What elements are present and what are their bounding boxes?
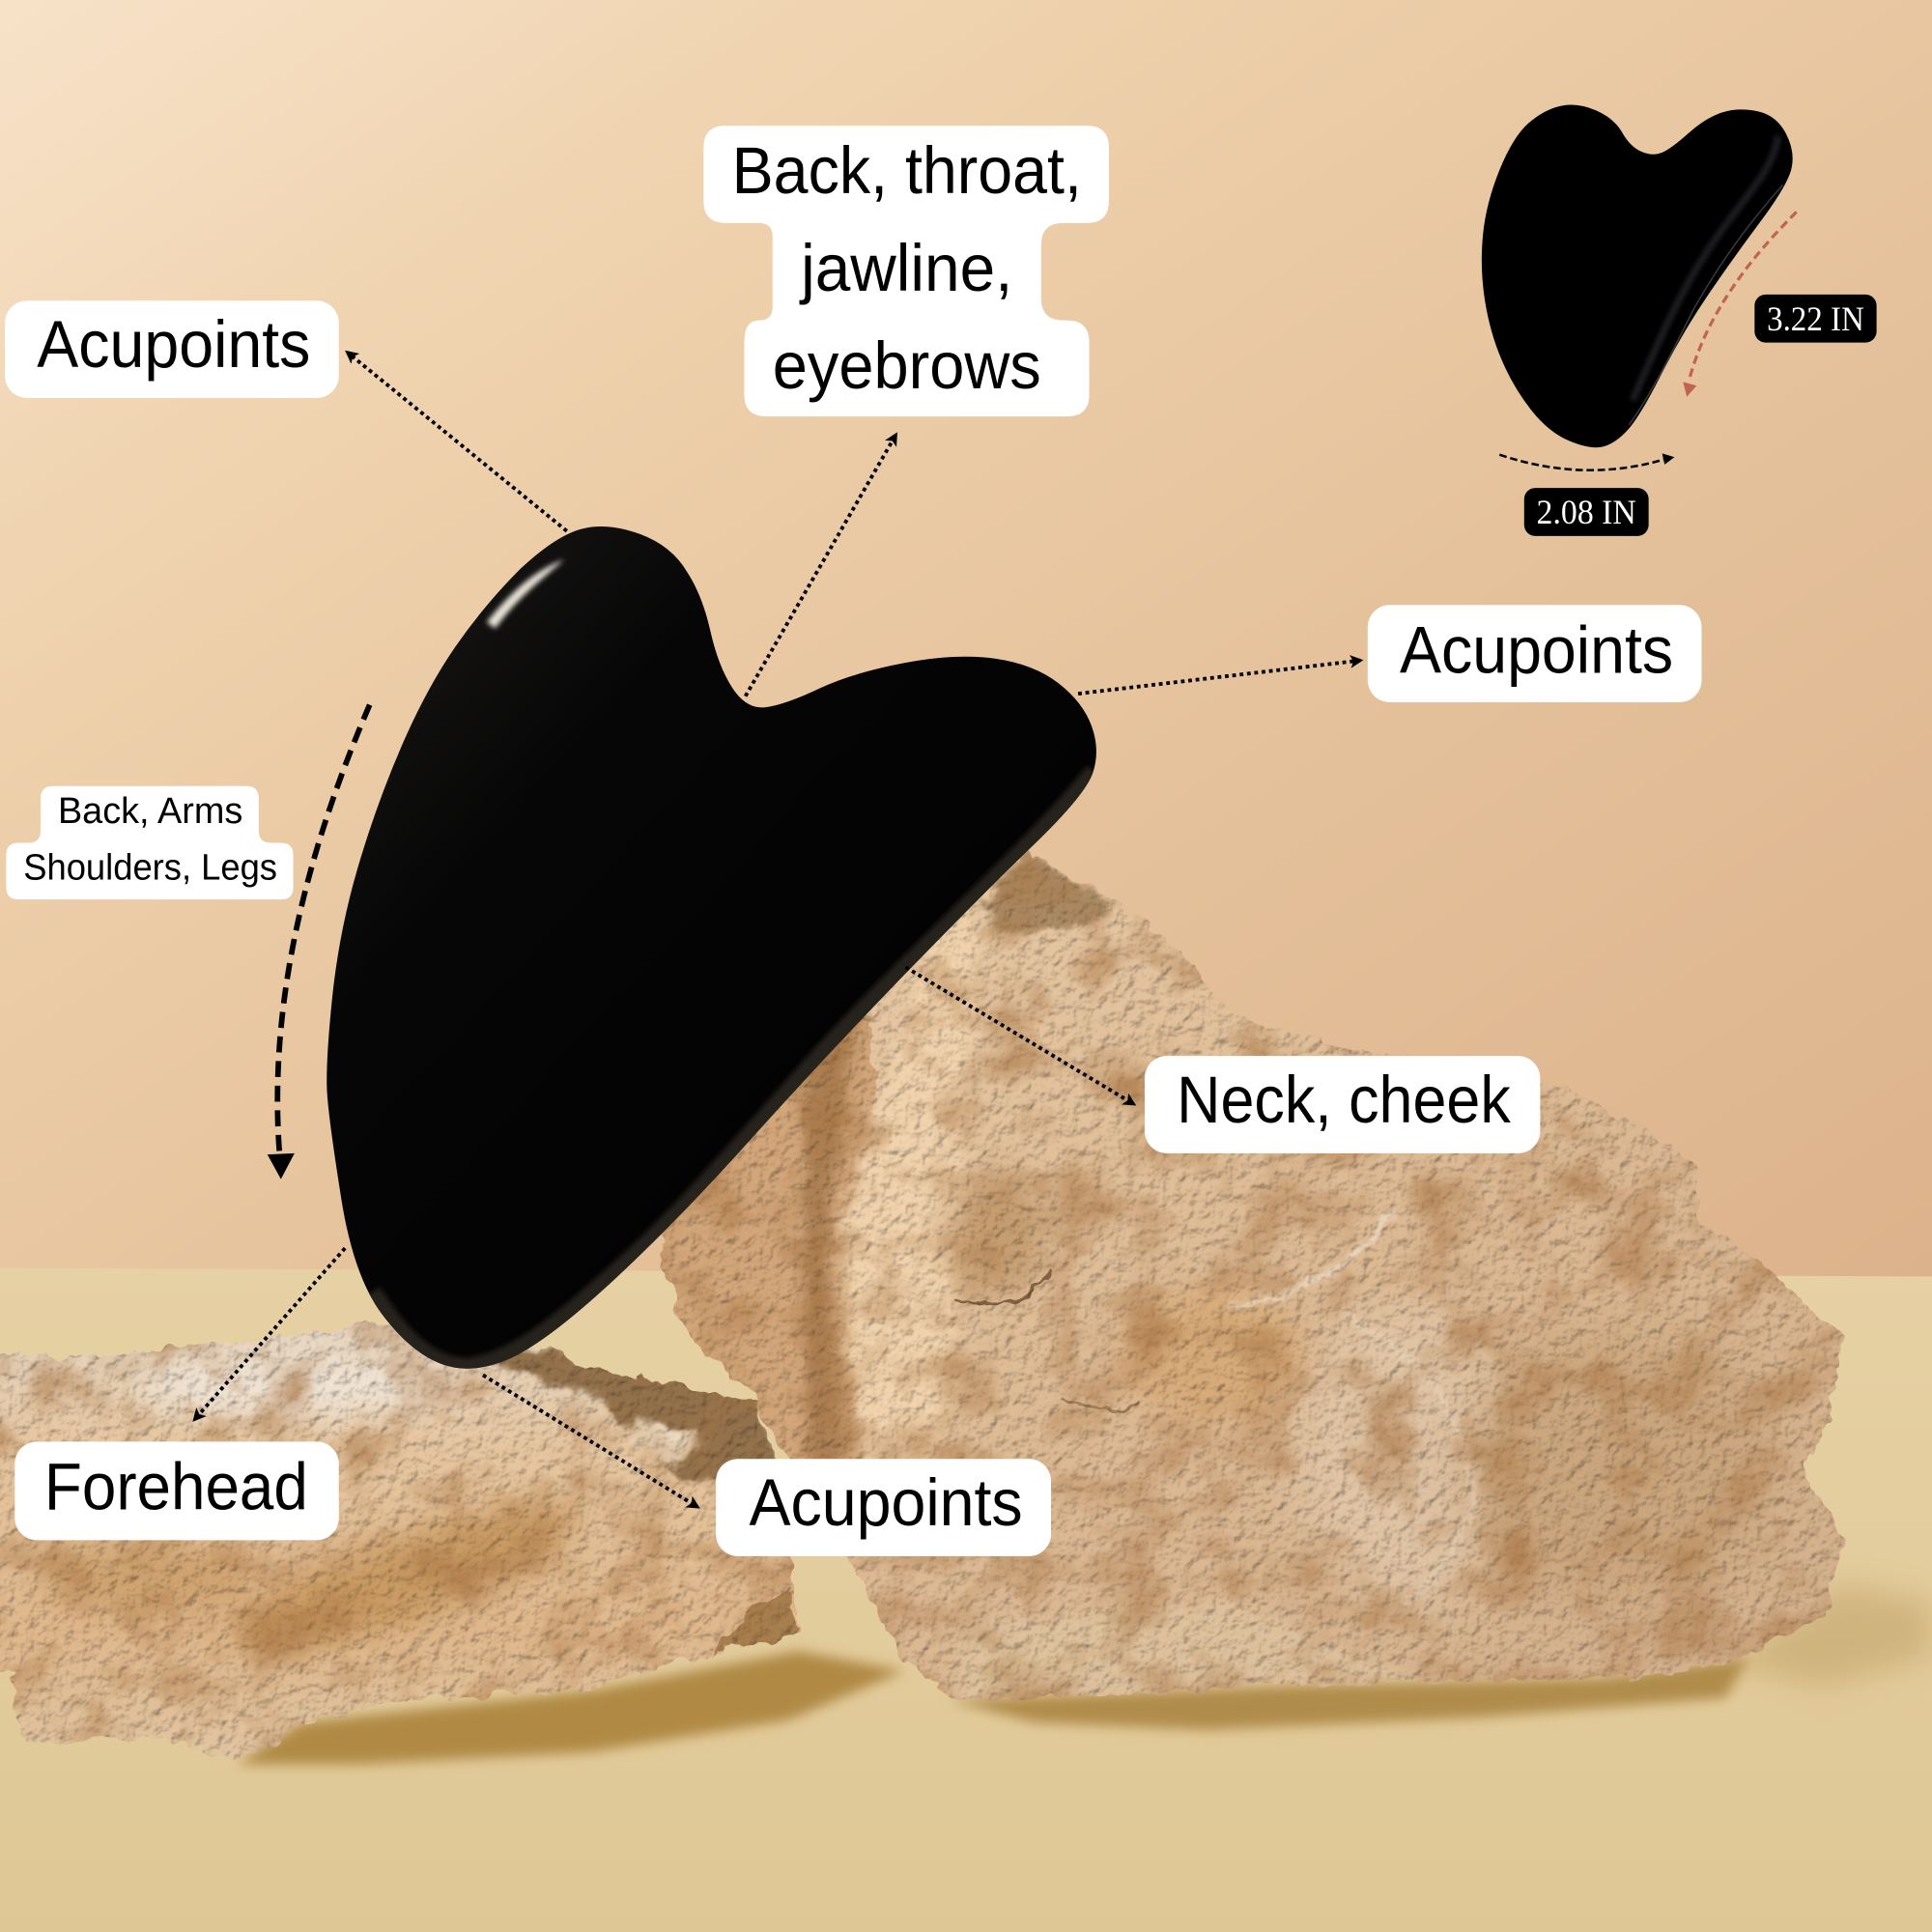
wall background <box>0 0 1932 1282</box>
gua sha stone main <box>327 526 1096 1370</box>
label: top left acupoints <box>5 300 339 398</box>
arrow: to forehead <box>195 1248 345 1419</box>
label: right acupoints: Acupoints <box>1400 612 1673 687</box>
arrow: to back throat label <box>746 435 895 696</box>
arrow: to bottom acupoints <box>483 1375 697 1507</box>
arrow: red length measure <box>1683 212 1797 397</box>
arrow: to right acupoints <box>1078 661 1360 694</box>
arrow: to top left acupoints <box>348 353 567 531</box>
label: forehead <box>14 1441 339 1540</box>
label: back throat jawline eyebrows: Back, throat, <box>732 133 1082 208</box>
large rock <box>640 838 1873 1713</box>
badge: 2.08 IN: 2.08 IN <box>1537 493 1636 531</box>
label: forehead: Forehead <box>44 1449 308 1523</box>
label: bottom acupoints <box>716 1459 1051 1556</box>
arrow: black width measure <box>1499 453 1674 470</box>
label: back arms shoulders legs <box>6 786 294 899</box>
label: top left acupoints: Acupoints <box>37 307 310 382</box>
label: back arms shoulders legs: Shoulders, Legs <box>23 847 277 889</box>
label: neck cheek <box>1145 1056 1540 1153</box>
small rock <box>0 1306 813 1775</box>
label: right acupoints <box>1368 605 1701 702</box>
floor shadows <box>237 1583 1932 1765</box>
label: bottom acupoints: Acupoints <box>750 1465 1023 1540</box>
badge: 3.22 IN: 3.22 IN <box>1767 299 1864 338</box>
label: neck cheek: Neck, cheek <box>1177 1063 1511 1137</box>
arrow: to neck cheek <box>906 967 1133 1104</box>
badge: 2.08 IN <box>1524 488 1649 536</box>
gua sha stone reference photo <box>1482 104 1793 447</box>
label: back throat jawline eyebrows <box>703 126 1109 416</box>
label: back throat jawline eyebrows: eyebrows <box>773 328 1041 403</box>
arrow: curved dashed along long edge <box>268 705 370 1179</box>
label: back arms shoulders legs: Back, Arms <box>58 790 242 832</box>
floor surface <box>0 1267 1932 1932</box>
badge: 3.22 IN <box>1754 295 1877 343</box>
label: back throat jawline eyebrows: jawline, <box>799 231 1012 305</box>
